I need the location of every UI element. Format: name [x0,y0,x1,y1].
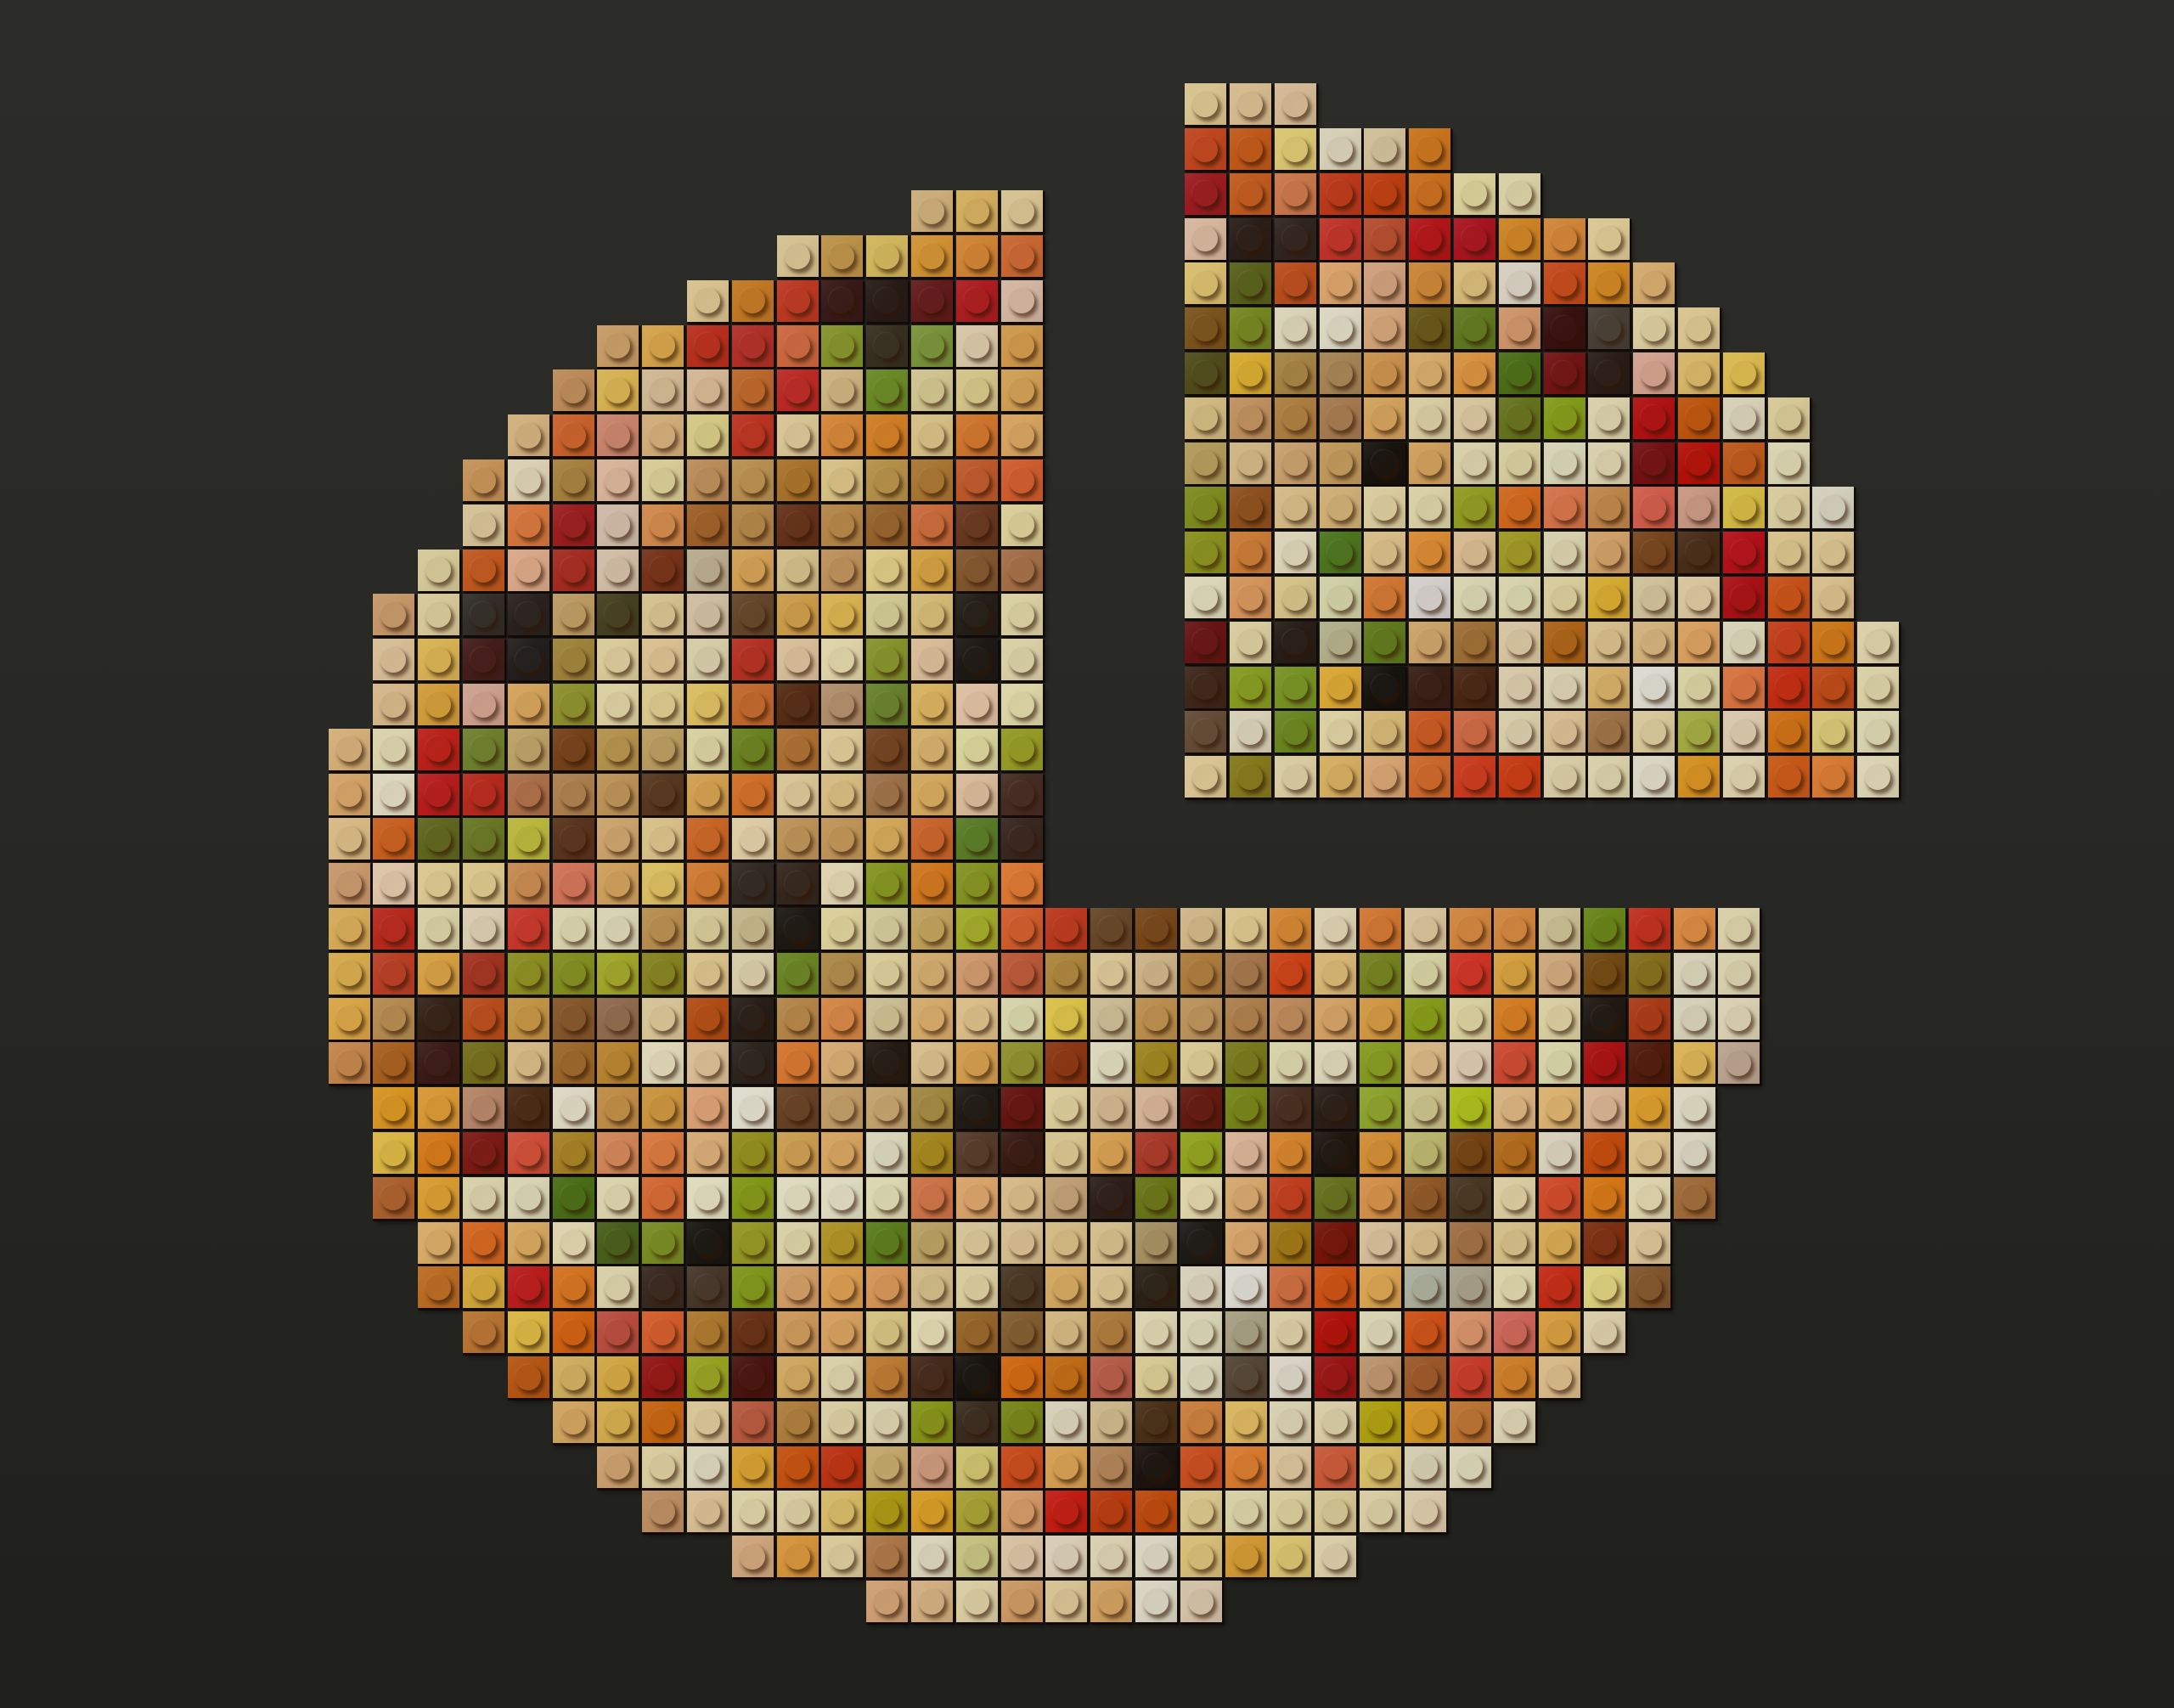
main pie brick row 11 [373,639,1046,684]
main pie brick row 5 [553,369,1046,414]
slice brick row 3 [1185,173,1544,218]
main pie brick row 23 [373,1177,1718,1222]
slice brick row 14 [1185,667,1902,711]
slice brick row 4 [1185,218,1633,262]
main pie brick row 30 [642,1491,1450,1536]
main pie brick row 27 [508,1356,1584,1401]
slice brick row 2 [1185,128,1454,173]
slice brick row 10 [1185,487,1857,532]
main pie brick row 18 [329,953,1763,998]
slice brick row 7 [1185,352,1768,397]
slice brick row 11 [1185,532,1857,577]
main pie brick row 28 [553,1401,1539,1446]
slice brick row 12 [1185,577,1857,622]
main pie brick row 22 [373,1132,1718,1177]
main pie brick row 12 [373,684,1046,729]
main pie brick row 32 [866,1581,1225,1626]
main pie brick row 19 [329,998,1763,1042]
main pie brick row 21 [373,1087,1718,1132]
main pie brick row 3 [687,280,1046,325]
main pie brick row 13 [329,729,1046,774]
main pie brick row 2 [777,235,1046,280]
chart: separated quarter pie slice made of bricks [1185,83,1902,801]
main pie brick row 20 [329,1042,1763,1087]
main pie brick row 24 [418,1222,1673,1266]
main pie brick row 8 [463,505,1046,550]
slice brick row 6 [1185,307,1723,352]
main pie brick row 15 [329,818,1045,863]
main pie brick row 25 [418,1266,1673,1311]
main pie brick row 17 [329,908,1763,953]
main pie brick row 26 [463,1311,1629,1356]
slice brick row 1 [1185,83,1320,128]
main pie brick row 1 [911,190,1046,235]
main pie brick row 4 [597,325,1046,370]
slice brick row 16 [1185,756,1902,801]
main pie brick row 6 [508,414,1046,459]
chart: main pie body made of bricks [329,190,1763,1626]
main pie brick row 14 [329,774,1046,819]
main pie brick row 9 [418,550,1046,595]
main pie brick row 29 [597,1446,1494,1491]
slice brick row 8 [1185,397,1812,443]
main pie brick row 7 [463,459,1046,505]
slice brick row 9 [1185,443,1812,487]
slice brick row 13 [1185,622,1902,667]
main pie brick row 16 [329,863,1045,908]
main pie brick row 31 [732,1536,1360,1581]
slice brick row 15 [1185,711,1902,756]
slice brick row 5 [1185,262,1678,307]
main pie brick row 10 [373,594,1046,639]
